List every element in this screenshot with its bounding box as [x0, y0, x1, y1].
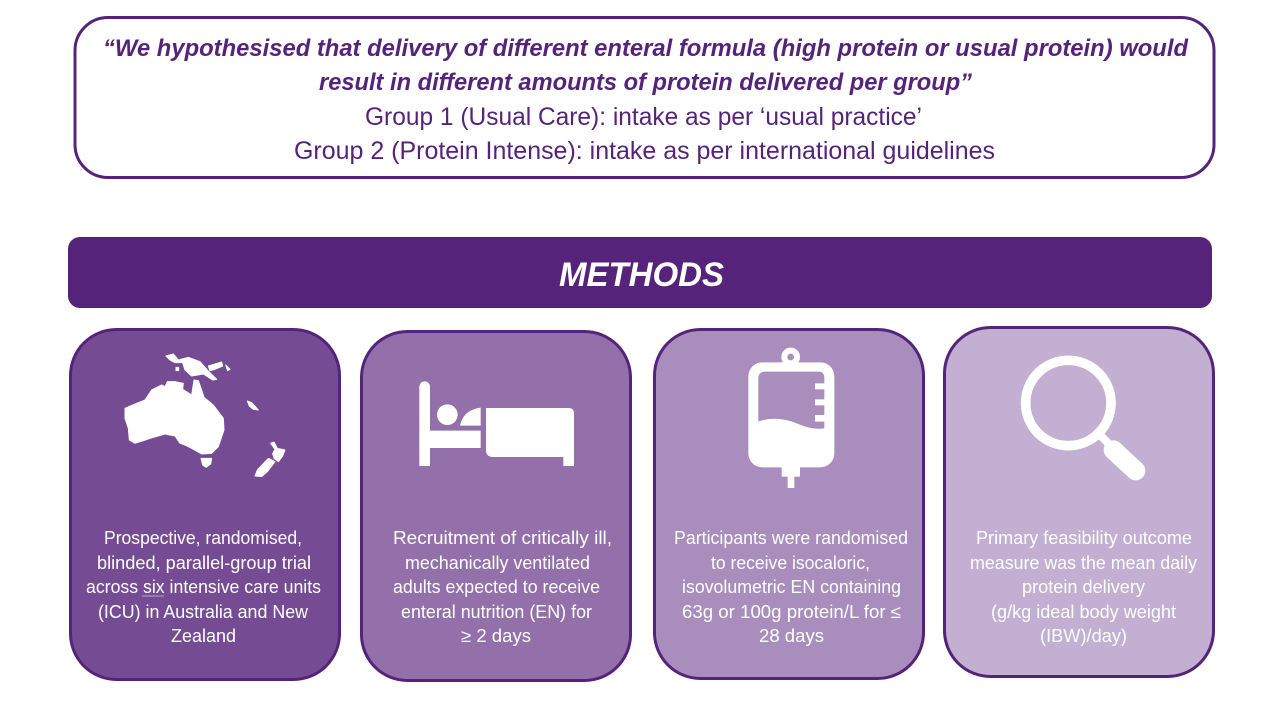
- icon: map of Australia and New Zealand: [125, 354, 285, 477]
- trial design text: Zealand: [171, 626, 236, 646]
- outcome measure text: (g/kg ideal body weight: [991, 602, 1176, 622]
- outcome measure text: protein delivery: [1022, 577, 1145, 597]
- group definitions: Group 2 (Protein Intense): intake as per international guidelines: [294, 137, 995, 165]
- heading: methods: [68, 237, 1212, 308]
- randomisation text: 28 days: [759, 626, 824, 646]
- recruitment text: ≥ 2 days: [461, 626, 531, 646]
- group definitions: Group 1 (Usual Care): intake as per ‘usual practice’: [365, 103, 922, 131]
- trial design text: Prospective, randomised,: [104, 528, 302, 548]
- randomisation text: 63g or 100g protein/L for ≤: [682, 602, 901, 622]
- hypothesis quote: result in different amounts of protein delivered per group”: [319, 69, 972, 96]
- recruitment text: mechanically ventilated: [405, 553, 590, 573]
- heading: methods: METHODS: [559, 256, 724, 294]
- recruitment text: [393, 528, 612, 646]
- icon: magnifying glass: [1026, 360, 1136, 471]
- outcome measure text: [970, 528, 1197, 646]
- panel: randomisation: [654, 330, 924, 678]
- outcome measure text: (IBW)/day): [1040, 626, 1127, 646]
- randomisation text: to receive isocaloric,: [711, 553, 870, 573]
- panel: outcome measure: [944, 328, 1214, 676]
- outcome measure text: measure was the mean daily: [970, 553, 1197, 573]
- trial design text: blinded, parallel-group trial: [97, 553, 311, 573]
- randomisation text: [674, 528, 908, 646]
- recruitment text: Recruitment of critically ill,: [393, 528, 612, 548]
- trial design text: (ICU) in Australia and New: [98, 602, 309, 622]
- outcome measure text: Primary feasibility outcome: [976, 528, 1192, 548]
- icon: bed: [419, 381, 574, 466]
- icon: feeding bag: [748, 351, 834, 488]
- panel: recruitment: [362, 332, 630, 680]
- randomisation text: Participants were randomised: [674, 528, 908, 548]
- hypothesis quote: [103, 35, 1189, 96]
- panel: hypothesis: [75, 18, 1214, 178]
- trial design text: across six intensive care units: [86, 577, 321, 597]
- hypothesis quote: “We hypothesised that delivery of different enteral formula (high protein or usual protein) would: [103, 35, 1189, 62]
- recruitment text: adults expected to receive: [393, 577, 600, 597]
- trial design text: [86, 528, 321, 646]
- randomisation text: isovolumetric EN containing: [682, 577, 901, 597]
- recruitment text: enteral nutrition (EN) for: [401, 602, 592, 622]
- panel: trial design: [70, 330, 340, 680]
- group definitions: [294, 103, 995, 165]
